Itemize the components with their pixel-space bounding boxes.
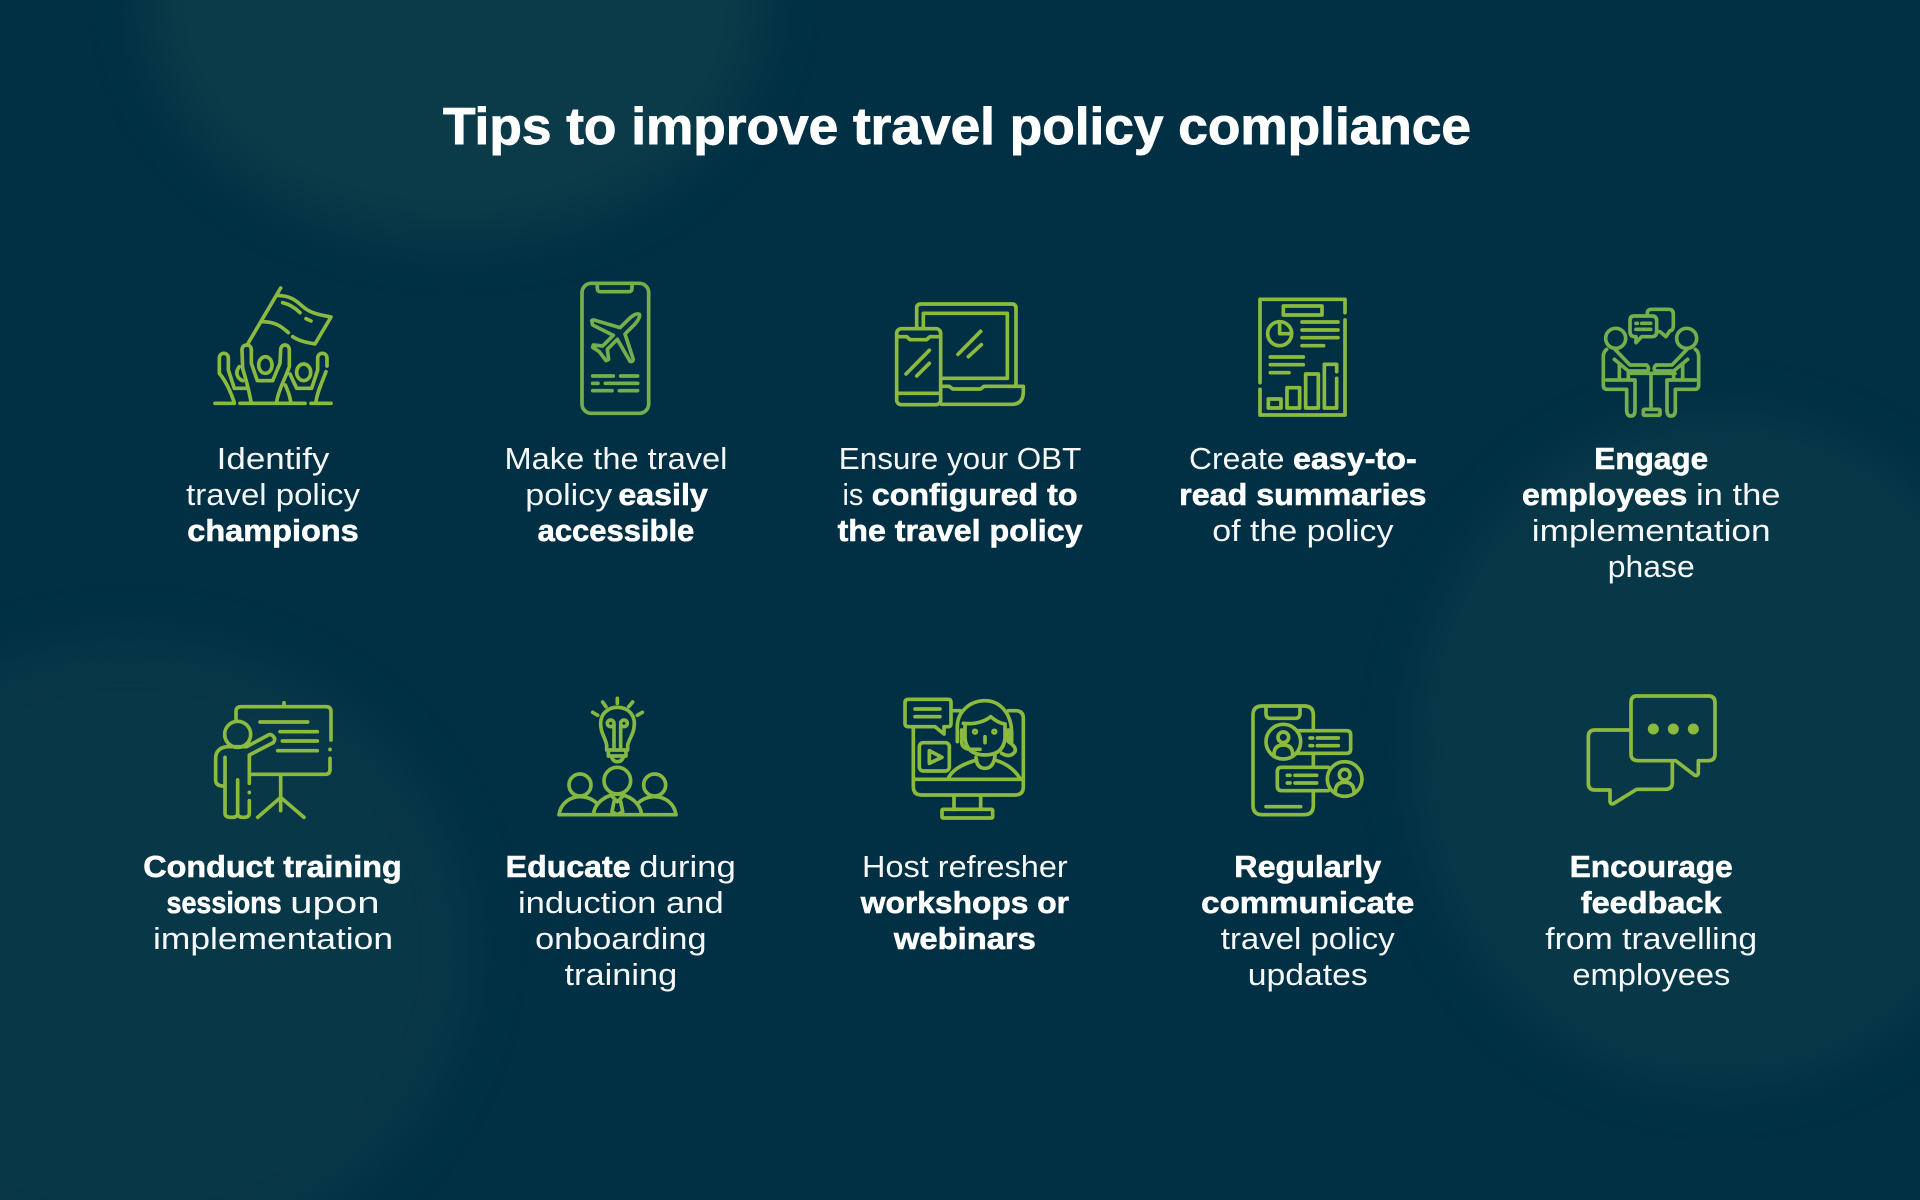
text: identify travel policy champions [186, 441, 361, 548]
text: educate during induction and onboarding training [506, 849, 736, 992]
text: engage employees in the implementation phase: Engage [1594, 441, 1708, 476]
text: conduct training sessions: sessions [166, 885, 282, 920]
icon: report document with charts [1260, 299, 1345, 415]
text: make the travel policy easily accessible: Make the travel [504, 441, 727, 476]
text: encourage feedback from travelling employees [1545, 849, 1757, 992]
text: educate during induction and onboarding training: training [564, 957, 677, 992]
tip 1: travel policy champions [186, 288, 361, 548]
icon: phone with chat messages [1253, 706, 1362, 815]
text: encourage feedback from travelling employees: from travelling [1545, 921, 1757, 956]
text: ensure your OBT is configured: configured to [872, 477, 1078, 512]
text: regularly communicate travel policy updates: Regularly [1234, 849, 1382, 884]
text: regularly communicate travel policy updates [1201, 849, 1414, 992]
text: engage employees in the implementation phase [1522, 441, 1780, 584]
text: ensure your OBT is configured: Ensure your OBT [839, 441, 1081, 476]
text: identify travel policy champions: Identify [217, 441, 330, 476]
icon: presenter at a board [216, 703, 331, 817]
text: engage employees in the implementation phase: in the [1696, 477, 1780, 512]
text: make the travel policy easily accessible: accessible [538, 513, 694, 548]
tip 8: refresher workshops [860, 699, 1069, 956]
tip 7: educate during onboarding [506, 698, 736, 992]
text: conduct training sessions: upon [290, 885, 380, 920]
tip 9: regularly communicate updates [1201, 706, 1414, 992]
text: make the travel policy easily accessible [504, 441, 727, 548]
text: create easy-to-read summaries: Create [1189, 441, 1284, 476]
text: regularly communicate travel policy updates: updates [1248, 957, 1368, 992]
text: host refresher workshops or webinars: webinars [893, 921, 1036, 956]
text: conduct training sessions [143, 849, 402, 956]
tip 2: easily accessible [504, 283, 727, 548]
text: make the travel policy easily accessible: easily [618, 477, 709, 512]
text: identify travel policy champions: champions [187, 513, 359, 548]
text: conduct training sessions: Conduct training [143, 849, 402, 884]
text: make the travel policy easily accessible: policy [525, 477, 613, 512]
text: educate during induction and onboarding training: Educate [506, 849, 631, 884]
icon: monitor with webinar host [905, 699, 1023, 818]
tip 4: easy-to-read summaries [1179, 299, 1426, 548]
text: host refresher workshops or webinars: workshops or [860, 885, 1069, 920]
icon: two people at a table talking [1603, 309, 1699, 416]
text: create easy-to-read summaries: easy-to- [1293, 441, 1417, 476]
text: create easy-to-read summaries [1179, 441, 1426, 548]
text: identify travel policy champions: travel policy [186, 477, 361, 512]
icon: light bulb above three people [559, 698, 676, 815]
tip 10: encourage feedback [1545, 696, 1757, 992]
icon: phone with airplane [582, 283, 649, 413]
icon: two speech bubbles [1588, 696, 1715, 804]
icon: flag and cheering people [215, 288, 331, 403]
text: regularly communicate travel policy updates: travel policy [1221, 921, 1395, 956]
text: regularly communicate travel policy updates: communicate [1201, 885, 1414, 920]
icon: laptop and phone [897, 304, 1023, 405]
text: ensure your OBT is configured: the travel policy [838, 513, 1083, 548]
text: educate during induction and onboarding training: onboarding [535, 921, 706, 956]
title: Tips to improve travel policy compliance [443, 98, 1471, 156]
text: host refresher workshops or webinars: Host refresher [862, 849, 1068, 884]
text: educate during induction and onboarding training: induction and [518, 885, 724, 920]
text: engage employees in the implementation phase: phase [1608, 549, 1695, 584]
text: encourage feedback from travelling employees: Encourage [1570, 849, 1733, 884]
text: engage employees in the implementation phase: employees [1522, 477, 1687, 512]
text: encourage feedback from travelling employees: employees [1572, 957, 1730, 992]
tip 3: OBT configured [838, 304, 1083, 548]
text: create easy-to-read summaries: read summaries [1179, 477, 1426, 512]
text: educate during induction and onboarding training: during [639, 849, 736, 884]
text: engage employees in the implementation phase: implementation [1532, 513, 1771, 548]
text: ensure your OBT is configured: is [842, 477, 863, 512]
text: encourage feedback from travelling employees: feedback [1581, 885, 1722, 920]
tip 6: training sessions [143, 703, 402, 956]
text: conduct training sessions: implementation [153, 921, 393, 956]
text: create easy-to-read summaries: of the policy [1212, 513, 1394, 548]
text: host refresher workshops or webinars [860, 849, 1069, 956]
tip 5: engage employees [1522, 309, 1780, 584]
text: ensure your OBT is configured [838, 441, 1083, 548]
